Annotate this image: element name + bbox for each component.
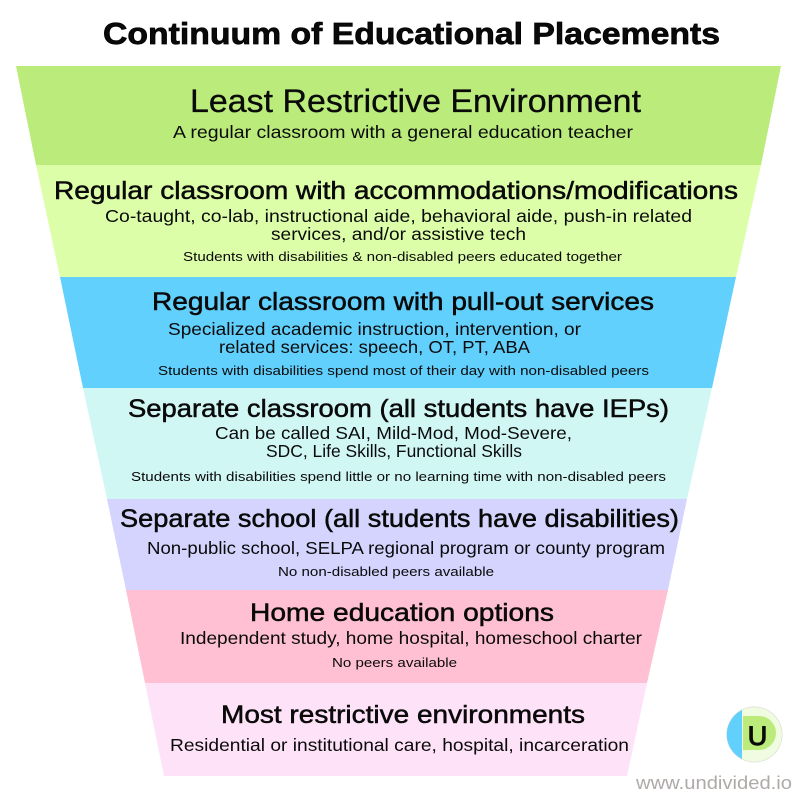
panel: regular classroom with accommodations	[36, 165, 761, 277]
heading: home education options: Home education options	[250, 599, 554, 627]
text: accommodations description	[105, 206, 692, 244]
text: separate classroom description	[215, 423, 572, 461]
heading: separate school: Separate school (all students have disabilities)	[120, 505, 679, 533]
note: most of their day: Students with disabilities spend most of their day with non-disabled peers	[158, 363, 650, 378]
icon: undivided logo	[726, 706, 782, 762]
text: pull-out description: related services: speech, OT, PT, ABA	[219, 337, 530, 357]
text: separate classroom description: Can be called SAI, Mild-Mod, Mod-Severe,	[215, 423, 572, 443]
note: educated together: Students with disabilities & non-disabled peers educated together	[183, 249, 623, 264]
panel: most restrictive environments	[145, 683, 647, 776]
text: website url: www.undivided.io	[635, 773, 792, 793]
icon: undivided logo: U	[748, 721, 767, 751]
note: little or no learning time: Students with disabilities spend little or no learning time with non-disabled peers	[131, 469, 667, 484]
title: Continuum of Educational Placements	[103, 16, 720, 51]
text: pull-out description	[168, 319, 581, 357]
panel: regular classroom with pull-out services	[60, 277, 736, 388]
text: accommodations description: Co-taught, co-lab, instructional aide, behavioral aide, push-in related	[105, 206, 692, 226]
panel: separate classroom	[83, 388, 712, 499]
text: separate classroom description: SDC, Life Skills, Functional Skills	[266, 441, 522, 461]
text: most restrictive description: Residential or institutional care, hospital, incarceration	[170, 735, 629, 755]
heading: least restrictive environment: Least Restrictive Environment	[190, 83, 641, 119]
panel: least restrictive environment	[16, 66, 781, 165]
heading: pull-out services: Regular classroom with pull-out services	[152, 288, 654, 316]
note: no peers: No peers available	[332, 655, 457, 670]
panel: home education options	[126, 590, 668, 683]
heading: accommodations/modifications: Regular classroom with accommodations/modifications	[54, 177, 738, 205]
text: regular classroom description: A regular classroom with a general education teacher	[173, 122, 633, 142]
heading: most restrictive environments: Most restrictive environments	[221, 701, 585, 729]
panel: separate school	[107, 499, 687, 590]
text: home education description: Independent study, home hospital, homeschool charter	[180, 628, 642, 648]
note: no non-disabled peers: No non-disabled peers available	[278, 564, 494, 579]
text: accommodations description: services, and/or assistive tech	[271, 224, 526, 244]
text: pull-out description: Specialized academic instruction, intervention, or	[168, 319, 581, 339]
text: separate school description: Non-public school, SELPA regional program or county program	[147, 538, 665, 558]
heading: separate classroom: Separate classroom (all students have IEPs)	[128, 395, 669, 423]
